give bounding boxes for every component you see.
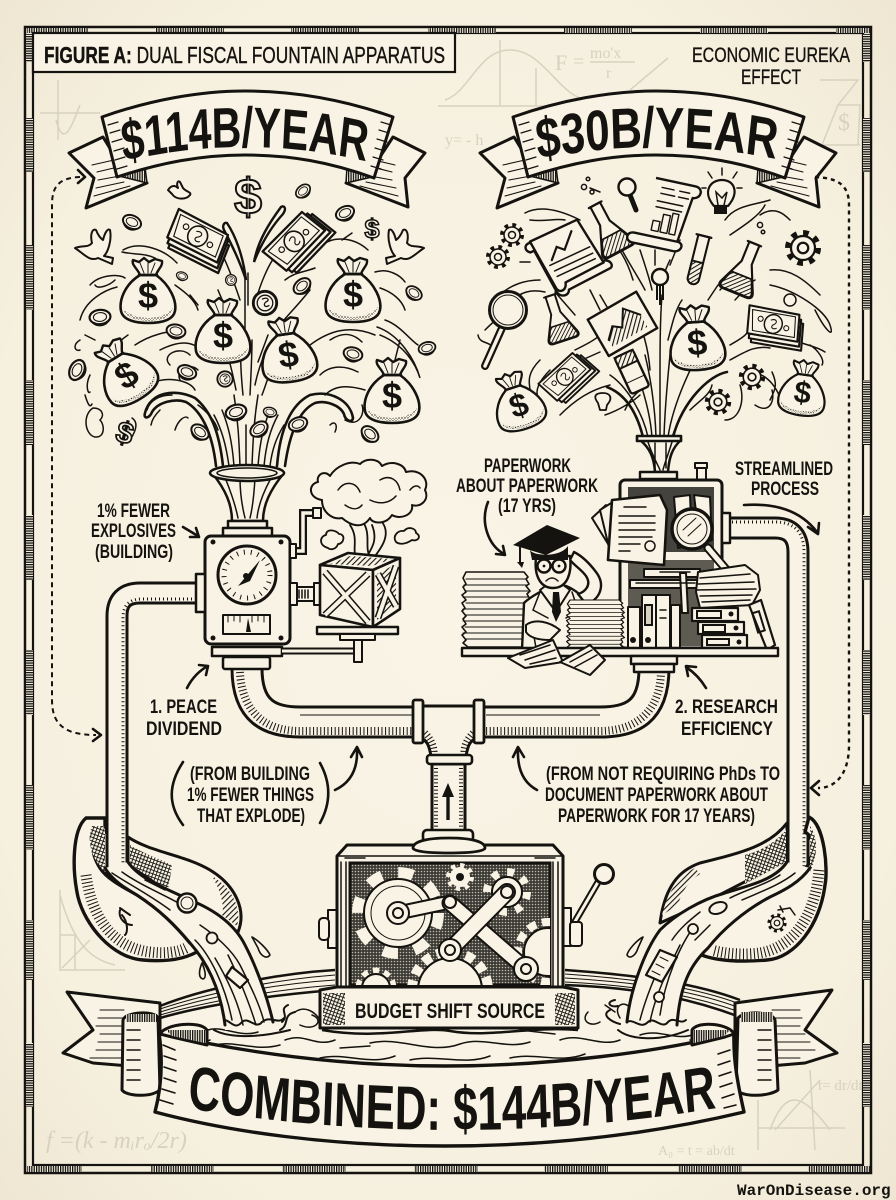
- right basin back: [660, 823, 787, 923]
- title box: [33, 33, 455, 72]
- coins: [120, 212, 143, 234]
- label: 1% fewer explosives: EXPLOSIVES: [91, 521, 176, 542]
- note: PhD paperwork: [545, 764, 780, 827]
- vertical pipe: [432, 764, 465, 834]
- left fountain spray: [66, 169, 437, 466]
- label: research efficiency: 2. RESEARCH: [675, 697, 778, 718]
- budget shift machine: [319, 830, 614, 1028]
- large magnifier: [485, 292, 526, 366]
- arrow: paperwork to scholar: [485, 502, 505, 555]
- label: peace dividend: 1. PEACE: [150, 697, 217, 718]
- banner body: [155, 1033, 744, 1146]
- label: 1% fewer explosives: (BUILDING): [95, 542, 173, 563]
- lever: [563, 864, 614, 946]
- gears: [352, 863, 550, 985]
- right funnel: [637, 436, 681, 479]
- dashed return arrow right: [811, 177, 849, 795]
- left top banner: $114B/YEAR: [122, 106, 368, 164]
- cylinder: [614, 350, 650, 394]
- light bulb: [702, 168, 742, 214]
- dashed return arrow left: [52, 170, 101, 741]
- banknotes: [157, 203, 239, 280]
- side flange: [722, 513, 730, 543]
- faded math sketches: A₀ = t = ab/dt: [658, 1144, 735, 1159]
- plinth label: BUDGET SHIFT SOURCE: [355, 1000, 545, 1023]
- report scroll: [626, 175, 702, 254]
- label: 1% fewer explosives: 1% FEWER: [97, 501, 170, 522]
- scholar: [513, 525, 601, 650]
- loose sheets: [508, 640, 605, 675]
- label: paperwork about paperwork: (17 YRS): [498, 496, 556, 517]
- arrow: research efficiency: [686, 666, 706, 688]
- label: paperwork about paperwork: [456, 456, 598, 517]
- note: building fewer things: (FROM BUILDING: [190, 764, 310, 785]
- front paper stack: [567, 600, 624, 650]
- source url: WarOnDisease.org: [737, 1182, 891, 1200]
- lower collars: [212, 647, 282, 656]
- label: research efficiency: EFFICIENCY: [681, 719, 773, 740]
- chart card: [588, 292, 657, 356]
- up arrow in central pipe: [442, 783, 454, 820]
- small bulb: [595, 393, 610, 410]
- banner curls: [160, 1024, 734, 1045]
- left side nub: [319, 910, 337, 948]
- gauge housing: [205, 536, 290, 644]
- smoke cloud: [311, 460, 426, 562]
- dark panel: [350, 863, 550, 985]
- note: building fewer things: THAT EXPLODE): [197, 806, 305, 827]
- subtitle: [692, 44, 850, 89]
- lab flasks: [580, 196, 636, 260]
- spray streaks: [75, 206, 420, 466]
- left fountain spray: $: [382, 375, 402, 416]
- right top banner: [478, 90, 838, 210]
- paper pile right: [696, 565, 760, 608]
- flat binders: [692, 600, 775, 650]
- shelf books: [628, 569, 700, 648]
- research paperwork assembly: [462, 436, 778, 675]
- label: peace dividend: DIVIDEND: [146, 719, 222, 740]
- right fountain spray: $: [792, 375, 813, 411]
- faded math sketches: t= dr/dt: [818, 1078, 864, 1094]
- left paper stack: [462, 572, 530, 647]
- desk shelf: [462, 648, 778, 656]
- note: PhD paperwork: PAPERWORK FOR 17 YEARS): [558, 806, 755, 827]
- T hub: [420, 706, 478, 756]
- collecting pool: [160, 970, 740, 1070]
- left fountain spray: $: [364, 214, 380, 244]
- connector to crate: [290, 583, 320, 605]
- gears: [502, 226, 522, 244]
- left fountain spray: $: [276, 333, 301, 376]
- banknotes: [739, 299, 811, 358]
- money bags: [667, 303, 726, 372]
- money bags: $: [138, 275, 158, 316]
- fanned paper: [592, 500, 636, 560]
- label: paperwork about paperwork: PAPERWORK: [484, 456, 571, 477]
- left basin and stream: [74, 818, 295, 1036]
- cabinet: [337, 845, 563, 990]
- faded math sketches: $: [838, 110, 850, 136]
- subtitle: EFFECT: [741, 66, 801, 89]
- binders upper: [674, 495, 712, 548]
- arrow: explosives to gauge: [183, 527, 199, 537]
- subtitle: ECONOMIC EUREKA: [692, 44, 850, 67]
- magnifier small: [618, 178, 636, 210]
- funnel: [210, 465, 284, 521]
- magnifying glass: [672, 509, 730, 574]
- banner tails: [63, 990, 837, 1095]
- money bags: [121, 258, 175, 323]
- machine housing: [620, 480, 722, 648]
- left basin back: [128, 837, 241, 932]
- lower linkage bar: [282, 640, 362, 662]
- faded math sketches: =: [573, 51, 584, 73]
- arrow: peace dividend: [187, 665, 208, 688]
- left top banner: [67, 90, 427, 210]
- note: PhD paperwork: DOCUMENT PAPERWORK ABOUT: [545, 785, 768, 806]
- left fountain spray: $: [112, 415, 137, 452]
- faded math sketches: F: [555, 50, 567, 75]
- dollar signs: $: [234, 169, 262, 225]
- banner text: COMBINED: $144B/YEAR: [190, 1067, 716, 1134]
- label: streamlined process: STREAMLINED: [735, 459, 833, 480]
- doves: [75, 181, 424, 264]
- label: 1% fewer explosives: [91, 501, 176, 563]
- note: building fewer things: 1% FEWER THINGS: [187, 785, 314, 806]
- central pipe with T junction: [240, 668, 661, 834]
- left riser pipe: [117, 593, 200, 880]
- crank pipe: [290, 508, 321, 558]
- label: paperwork about paperwork: ABOUT PAPERWORK: [456, 476, 598, 497]
- arrow: right note to pipe: [513, 747, 537, 790]
- gauge dial: [218, 546, 276, 604]
- right top banner: $30B/YEAR: [536, 106, 777, 162]
- gauge window: [223, 615, 270, 634]
- arrow: left note to pipe: [335, 747, 362, 790]
- left fountain spray: $: [213, 315, 233, 356]
- right fountain spray: [478, 168, 831, 437]
- base ring: [413, 830, 485, 853]
- right basin and stream: [606, 817, 826, 1038]
- label: peace dividend: [146, 697, 222, 740]
- right riser pipe: [728, 522, 804, 880]
- side flange: [196, 574, 205, 612]
- faded math sketches: f =(k - mᵢrₒ/2r): [46, 1128, 187, 1154]
- left fountain spray: $: [343, 274, 363, 315]
- title box: FIGURE A: DUAL FISCAL FOUNTAIN APPARATUS: [44, 42, 445, 68]
- faded math sketches: mo'x: [590, 45, 621, 62]
- certificate document: [608, 495, 667, 565]
- plinth label: [320, 987, 578, 1028]
- left fountain spray: $: [107, 352, 146, 398]
- note: PhD paperwork: (FROM NOT REQUIRING PhDs TO: [546, 764, 780, 785]
- arrow: streamlined: [744, 505, 819, 534]
- note: building fewer things: [172, 762, 328, 827]
- left valve gauge assembly: [196, 460, 426, 669]
- label: research efficiency: [675, 697, 778, 740]
- faded math sketches: r: [606, 65, 612, 82]
- label: streamlined process: PROCESS: [751, 479, 819, 500]
- small valve: [695, 463, 707, 480]
- test tube and ring: [685, 234, 711, 286]
- explosives crate: [317, 553, 400, 640]
- money bags: $: [686, 321, 709, 364]
- label: streamlined process: [735, 459, 833, 500]
- right fountain spray: $: [505, 385, 533, 425]
- spray streaks: [478, 177, 831, 437]
- lower collars right: [631, 656, 677, 672]
- flanges: [228, 521, 267, 528]
- chart scroll: [524, 214, 615, 302]
- faded math sketches: y= - h: [445, 132, 483, 149]
- bottom banner: [61, 988, 839, 1148]
